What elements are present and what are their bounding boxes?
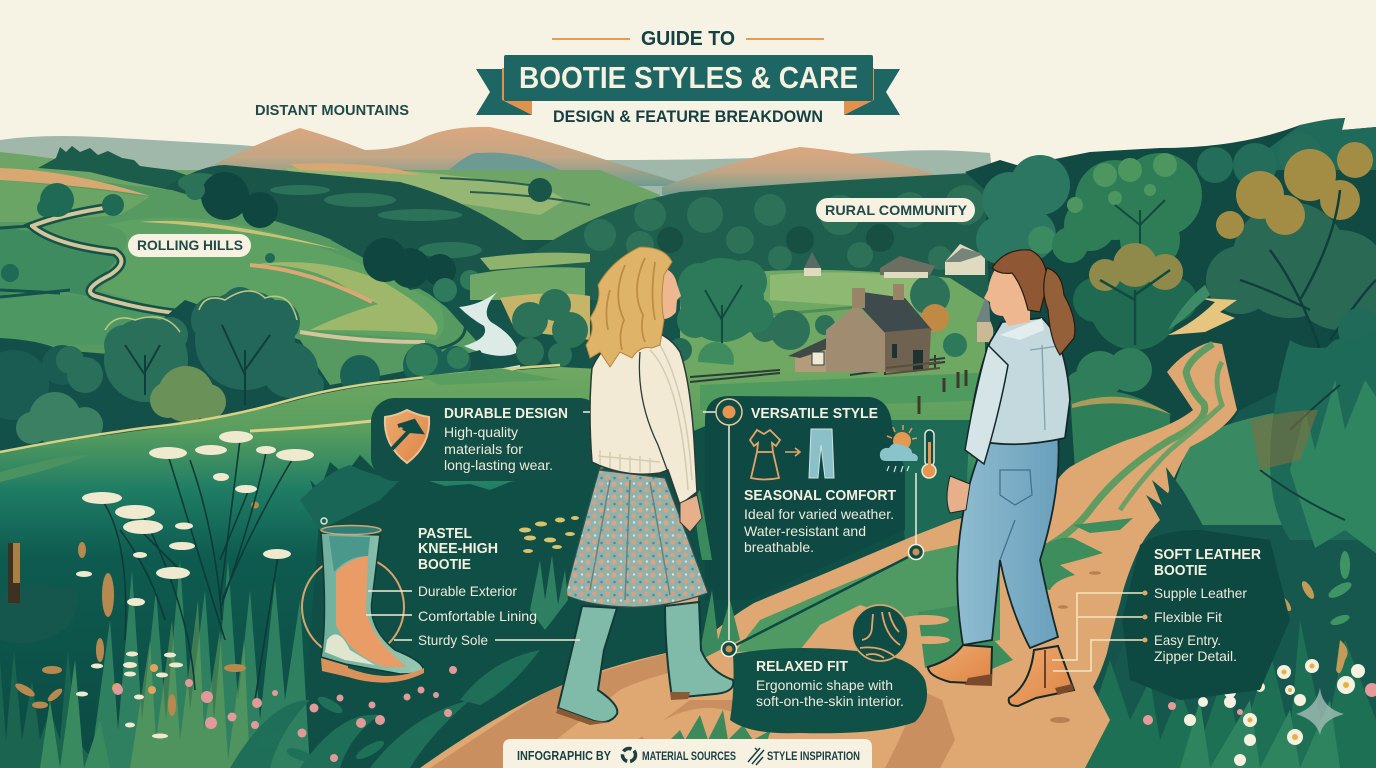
left boot bbox=[556, 606, 617, 725]
seasonal comfort text: Water-resistant and bbox=[744, 523, 866, 539]
title: guide to: GUIDE TO bbox=[641, 28, 735, 50]
neck and face bbox=[984, 262, 1030, 326]
rolling hills bbox=[0, 168, 480, 420]
durable design text: High-quality bbox=[444, 424, 518, 440]
subtitle: DESIGN & FEATURE BREAKDOWN bbox=[553, 107, 823, 126]
central forest bbox=[520, 172, 1010, 300]
right boot bbox=[665, 602, 733, 700]
label: rolling hills: ROLLING HILLS bbox=[137, 237, 243, 253]
village valley fields bbox=[470, 242, 1018, 385]
pastel bootie callouts: Comfortable Lining bbox=[418, 608, 537, 624]
soft leather bootie callouts: Supple Leather bbox=[1154, 585, 1247, 601]
tree behind left woman bbox=[668, 258, 773, 378]
icon: foot in circle bbox=[852, 605, 908, 661]
connector lines and nodes bbox=[583, 399, 924, 656]
arrow: dress to jeans bbox=[785, 448, 800, 456]
woman in denim with ponytail bbox=[928, 250, 1075, 706]
grasses left meadow bbox=[0, 560, 540, 768]
dark forest band bbox=[165, 165, 562, 302]
right meadow bbox=[1060, 330, 1376, 768]
durable design text: long-lasting wear. bbox=[444, 457, 553, 473]
sweater bbox=[590, 328, 697, 505]
fence post bbox=[8, 543, 20, 603]
icon: shield with hammer bbox=[385, 410, 429, 463]
pastel knee-high bootie illustration bbox=[302, 518, 424, 683]
soft leather bootie callouts: Flexible Fit bbox=[1154, 609, 1222, 625]
ponytail bbox=[1044, 268, 1075, 355]
seasonal comfort text: breathable. bbox=[744, 539, 814, 555]
footer credit bar bbox=[503, 739, 872, 768]
hand bbox=[947, 476, 970, 513]
durable design text bbox=[444, 406, 568, 473]
pastel bootie callouts: BOOTIE bbox=[418, 557, 471, 573]
panel: versatile style and seasonal comfort bbox=[705, 396, 905, 600]
right ankle boot bbox=[1009, 646, 1074, 706]
pine forest bbox=[38, 146, 200, 190]
midground trees left bbox=[0, 287, 588, 460]
title ribbon bbox=[476, 55, 900, 115]
left ankle boot bbox=[928, 645, 992, 686]
icon: style sparkle bbox=[748, 748, 764, 765]
skirt bbox=[565, 470, 708, 607]
distant mountains bbox=[0, 127, 1000, 240]
icon: dress bbox=[750, 430, 780, 480]
relaxed fit text bbox=[756, 659, 904, 709]
seasonal comfort text: SEASONAL COMFORT bbox=[744, 488, 896, 504]
soft leather bootie callouts bbox=[1052, 547, 1262, 671]
icon: weather cloud and sun bbox=[880, 425, 918, 472]
durable design text: DURABLE DESIGN bbox=[444, 406, 568, 422]
soft leather bootie callouts: Zipper Detail. bbox=[1154, 648, 1237, 664]
relaxed fit text: RELAXED FIT bbox=[756, 659, 848, 675]
grass near yellow flowers bbox=[530, 555, 568, 630]
panel: durable design bbox=[371, 398, 603, 481]
soft leather bootie callouts: BOOTIE bbox=[1154, 563, 1207, 579]
seasonal comfort text: Ideal for varied weather. bbox=[744, 506, 894, 522]
pastel bootie callouts: PASTEL bbox=[418, 526, 472, 542]
grass tufts near left woman bbox=[695, 490, 740, 660]
shirt bbox=[968, 318, 1070, 455]
icon: thermometer bbox=[922, 430, 936, 478]
stone cottage bbox=[788, 284, 940, 374]
panel: relaxed fit bbox=[730, 648, 927, 733]
hair bbox=[586, 247, 672, 367]
face bbox=[652, 268, 681, 319]
icon: jeans bbox=[809, 429, 834, 478]
pastel bootie callouts: Sturdy Sole bbox=[418, 632, 488, 648]
footer credit bar: STYLE INSPIRATION bbox=[767, 751, 860, 763]
versatile style text: VERSATILE STYLE bbox=[751, 406, 878, 422]
label: rural community bbox=[816, 198, 975, 222]
foreground hills and lawn bbox=[0, 362, 1010, 768]
footer credit bar: MATERIAL SOURCES bbox=[642, 751, 736, 763]
small meadow flowers bbox=[76, 652, 457, 762]
pastel bootie callouts bbox=[366, 526, 580, 648]
grass beside bootie path bbox=[1146, 467, 1210, 540]
hair bbox=[992, 250, 1047, 312]
footer credit bar: INFOGRAPHIC BY bbox=[517, 749, 612, 763]
woman with long blonde hair bbox=[556, 247, 733, 725]
wildflower umbels bbox=[76, 431, 314, 700]
hand bbox=[680, 495, 702, 532]
soft leather bootie callouts: Easy Entry. bbox=[1154, 632, 1221, 648]
icon: recycle bbox=[622, 748, 636, 762]
jeans bbox=[957, 433, 1059, 648]
dirt path bbox=[420, 342, 1237, 768]
relaxed fit text: soft-on-the-skin interior. bbox=[756, 693, 904, 709]
right forest bbox=[965, 118, 1376, 510]
soft leather bootie callouts: SOFT LEATHER bbox=[1154, 547, 1262, 563]
shirt sleeve bbox=[965, 345, 1008, 464]
scene base bbox=[0, 170, 1376, 768]
pastel bootie callouts: Durable Exterior bbox=[418, 583, 517, 599]
label: rolling hills bbox=[128, 234, 251, 257]
village houses bbox=[803, 244, 996, 342]
yellow flowers bbox=[519, 516, 579, 553]
relaxed fit text: Ergonomic shape with bbox=[756, 677, 893, 693]
dark foreground behind left woman bbox=[300, 420, 970, 768]
panel: soft leather bootie bbox=[1122, 530, 1290, 700]
far leg skin bbox=[668, 595, 698, 612]
pastel bootie callouts: KNEE-HIGH bbox=[418, 541, 498, 557]
label: rural community: RURAL COMMUNITY bbox=[825, 202, 968, 218]
title ribbon: BOOTIE STYLES & CARE bbox=[519, 60, 858, 95]
orange leaves bbox=[13, 502, 259, 716]
durable design text: materials for bbox=[444, 441, 523, 457]
fences bbox=[690, 355, 966, 414]
river bbox=[459, 292, 518, 356]
far fields bbox=[0, 152, 660, 240]
seasonal comfort text bbox=[744, 488, 896, 555]
label: distant mountains: DISTANT MOUNTAINS bbox=[255, 103, 409, 119]
